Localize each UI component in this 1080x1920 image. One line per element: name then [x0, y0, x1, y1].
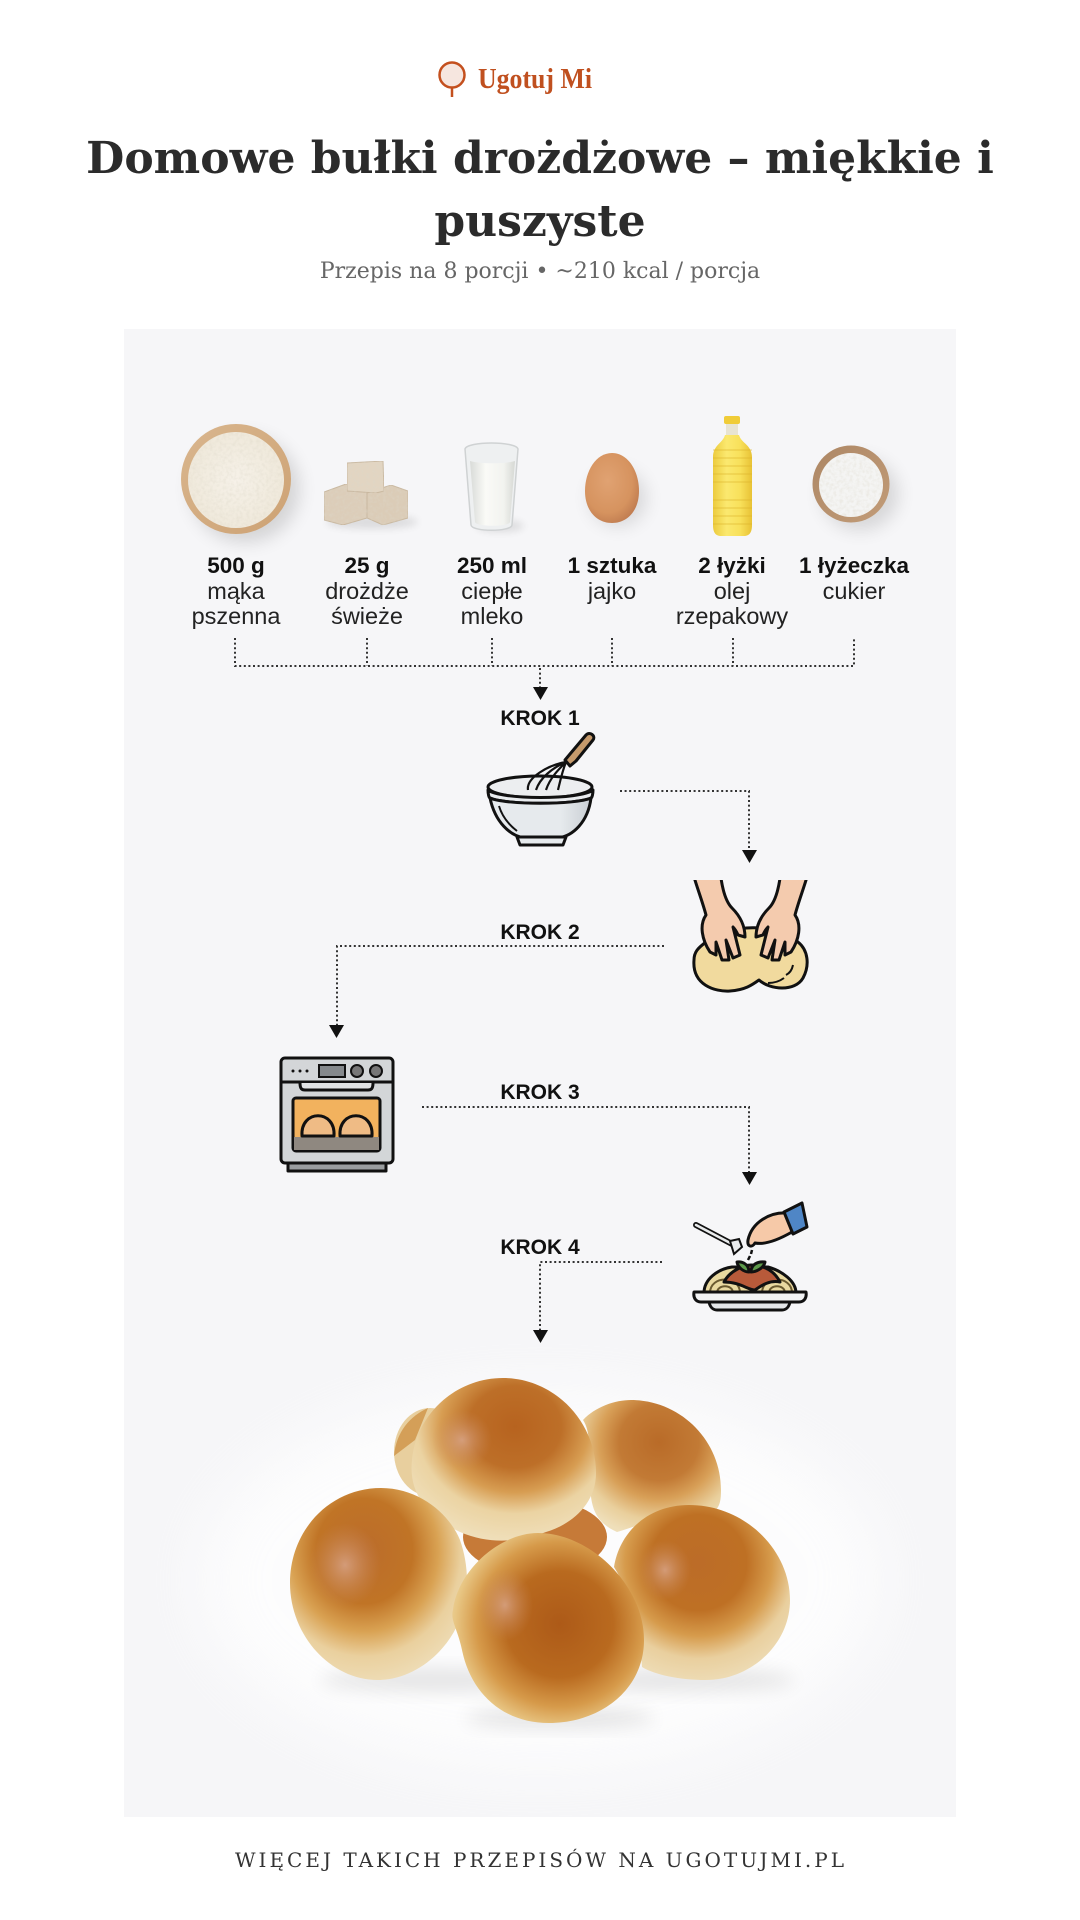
logo: Ugotuj Mi: [440, 62, 592, 97]
ingredient label: mąka pszenna: pszenna: [192, 603, 281, 629]
icon: hands kneading dough: [692, 870, 809, 991]
ingredient label: jajko: jajko: [587, 578, 636, 604]
arrow: step 2 to step 3: [329, 946, 664, 1038]
icon: plated pasta with garnish: [694, 1203, 807, 1310]
subtitle: Przepis na 8 porcji • ~210 kcal / porcja: [320, 259, 760, 284]
title: puszyste: [434, 196, 646, 247]
ingredient label: cukier: cukier: [823, 578, 886, 604]
bun: back left: [394, 1408, 466, 1496]
ingredient: flour bowl: [181, 424, 299, 542]
step 3 label: KROK 3: [500, 1081, 580, 1104]
panel: recipe image: [124, 329, 956, 1817]
ingredient: oil bottle: [713, 416, 752, 536]
ingredient label: olej rzepakowy: olej: [714, 578, 750, 604]
ingredient: yeast cubes: [324, 461, 418, 529]
ingredient label: ciepłe mleko: mleko: [461, 603, 523, 629]
arrow: ingredients to step 1: [235, 638, 854, 700]
ingredient label: jajko: 1 sztuka: [568, 553, 657, 578]
bun: front: [452, 1533, 644, 1723]
bun: left: [290, 1488, 467, 1680]
step 2 label: KROK 2: [500, 921, 580, 944]
bun: top centre: [412, 1378, 596, 1541]
ingredient label: cukier: 1 łyżeczka: [799, 553, 910, 578]
ingredient label: ciepłe mleko: ciepłe: [461, 578, 523, 604]
ingredient label: mąka pszenna: 500 g: [207, 553, 265, 578]
panel glow behind buns: [200, 1390, 880, 1770]
bun: hidden middle: [463, 1499, 607, 1575]
icon: oven with buns: [281, 1058, 393, 1171]
step 1 label: KROK 1: [500, 707, 580, 730]
arrow: step 1 to step 2: [620, 791, 757, 863]
icon: logo pin: [440, 62, 464, 97]
ingredient label: drożdże świeże: drożdże: [325, 578, 409, 604]
bun: top right: [583, 1400, 721, 1532]
ingredient label: drożdże świeże: 25 g: [344, 553, 390, 578]
step 4 label: KROK 4: [500, 1236, 580, 1259]
ingredient label: drożdże świeże: świeże: [331, 603, 403, 629]
title: Domowe bułki drożdżowe – miękkie i: [86, 133, 994, 184]
logo wordmark: Ugotuj Mi: [478, 64, 592, 95]
photo: pile of golden buns: [290, 1378, 795, 1728]
footer call to action: WIĘCEJ TAKICH PRZEPISÓW NA UGOTUJMI.PL: [235, 1847, 847, 1872]
ingredient: sugar bowl: [812, 446, 898, 530]
ingredient: egg: [585, 453, 646, 526]
bun: right: [614, 1505, 790, 1680]
ingredient label: ciepłe mleko: 250 ml: [457, 553, 527, 578]
ingredient: glass of milk: [465, 443, 524, 532]
icon: bowl with whisk: [488, 734, 594, 845]
arrow: step 3 to step 4: [422, 1107, 757, 1185]
arrow: step 4 to buns: [533, 1262, 662, 1343]
ingredient label: olej rzepakowy: rzepakowy: [676, 603, 788, 629]
ingredient label: olej rzepakowy: 2 łyżki: [698, 553, 766, 578]
ingredient label: mąka pszenna: mąka: [207, 578, 266, 604]
